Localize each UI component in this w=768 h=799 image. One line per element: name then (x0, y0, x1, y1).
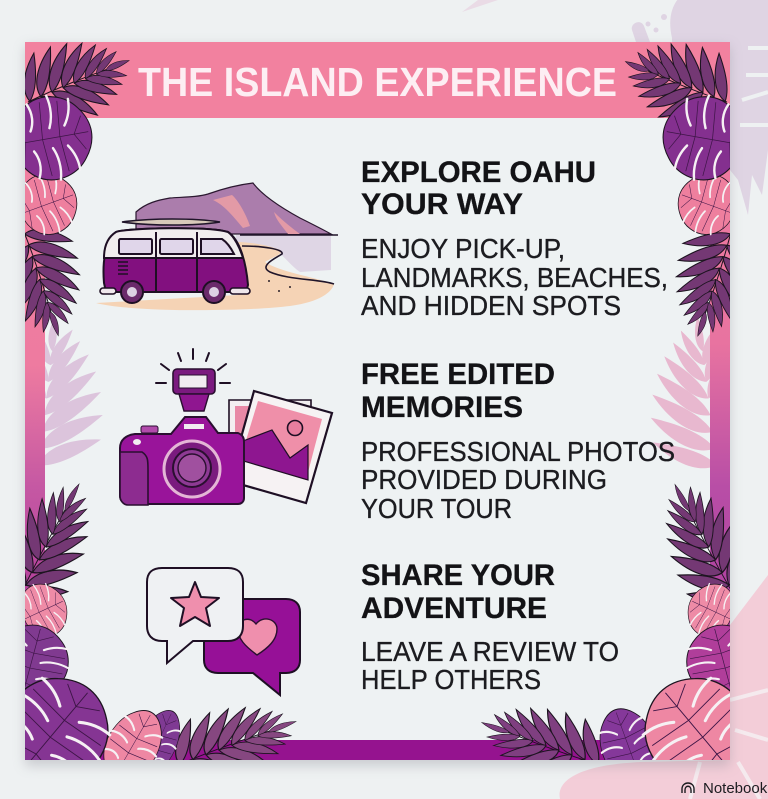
sand (96, 242, 334, 310)
palm: bottom left (175, 706, 297, 760)
heading: share: ADVENTURE (361, 592, 547, 625)
heading: memories: MEMORIES (361, 391, 523, 424)
van upper (104, 228, 243, 258)
palm: top left (25, 42, 130, 116)
text: memories body (361, 436, 675, 524)
palm: left upper (25, 230, 81, 336)
white bubble (147, 568, 243, 663)
sand dots (268, 280, 291, 292)
leaf: purple monstera left (25, 94, 92, 181)
leaf: purple bottom right (600, 708, 653, 760)
door lines (156, 232, 197, 292)
purple bubble (204, 599, 300, 695)
leaf: large purple corner left (25, 676, 112, 760)
surfboard (122, 219, 220, 225)
windows (119, 239, 234, 254)
leaf: magenta right lower (686, 624, 730, 688)
palm: top right (624, 42, 728, 118)
text: explore body: AND HIDDEN SPOTS (361, 290, 621, 321)
leaf: small pink left (25, 582, 68, 634)
leaf: purple monstera right (662, 94, 730, 181)
text: share body: HELP OTHERS (361, 664, 541, 695)
leaf: purple bottom left small (154, 710, 180, 760)
text: memories body: PROVIDED DURING (361, 464, 607, 495)
icon: review bubbles (147, 568, 300, 695)
text: explore body (361, 233, 668, 321)
heading: explore: EXPLORE OAHU (361, 156, 596, 189)
palm: left lower (25, 483, 90, 595)
lens (164, 441, 220, 497)
flash rays (156, 349, 230, 383)
faint palm: right (651, 319, 710, 468)
leaf: purple left lower (25, 624, 69, 688)
leaf: pink monstera right (678, 176, 730, 236)
palm: right lower (665, 484, 730, 598)
faint palm: left (45, 316, 102, 466)
flash (173, 369, 215, 394)
leaf: pink bottom left (103, 710, 164, 760)
bumpers (100, 288, 250, 294)
sea (236, 235, 331, 272)
palm: bottom right (481, 707, 600, 760)
polaroid (229, 391, 332, 503)
text: share body: LEAVE A REVIEW TO (361, 636, 619, 667)
watermark: NotebookLM: Notebook (703, 780, 768, 797)
icon: van on beach (96, 183, 338, 310)
title: THE ISLAND EXPERIENCE (138, 59, 617, 105)
heading: explore: YOUR WAY (361, 188, 523, 221)
background hibiscus: pink bottom right (560, 575, 768, 799)
text: memories body: PROFESSIONAL PHOTOS (361, 436, 675, 467)
leaf: small pink right (688, 582, 730, 634)
icon: camera and photos (120, 349, 332, 505)
heart (238, 619, 277, 655)
heading: memories (361, 358, 555, 424)
heading: explore (361, 156, 596, 221)
background hibiscus: lavender top right (462, 0, 768, 215)
text: explore body: ENJOY PICK-UP, (361, 233, 565, 264)
heading: memories: FREE EDITED (361, 358, 555, 391)
text: share body (361, 636, 619, 695)
text: explore body: LANDMARKS, BEACHES, (361, 262, 668, 293)
heading: share (361, 559, 555, 625)
camera body (120, 417, 244, 504)
mountain highlights (213, 195, 300, 234)
star (171, 582, 219, 626)
wheels (121, 281, 225, 303)
palm: right upper (675, 232, 730, 337)
back photo (229, 400, 311, 492)
mountain (136, 183, 331, 234)
heading: share: SHARE YOUR (361, 559, 555, 592)
text: memories body: YOUR TOUR (361, 493, 512, 524)
shoreline (240, 235, 338, 284)
leaf: large pink corner right (642, 676, 730, 760)
leaf: pink monstera left (25, 176, 78, 236)
van body (104, 228, 248, 292)
